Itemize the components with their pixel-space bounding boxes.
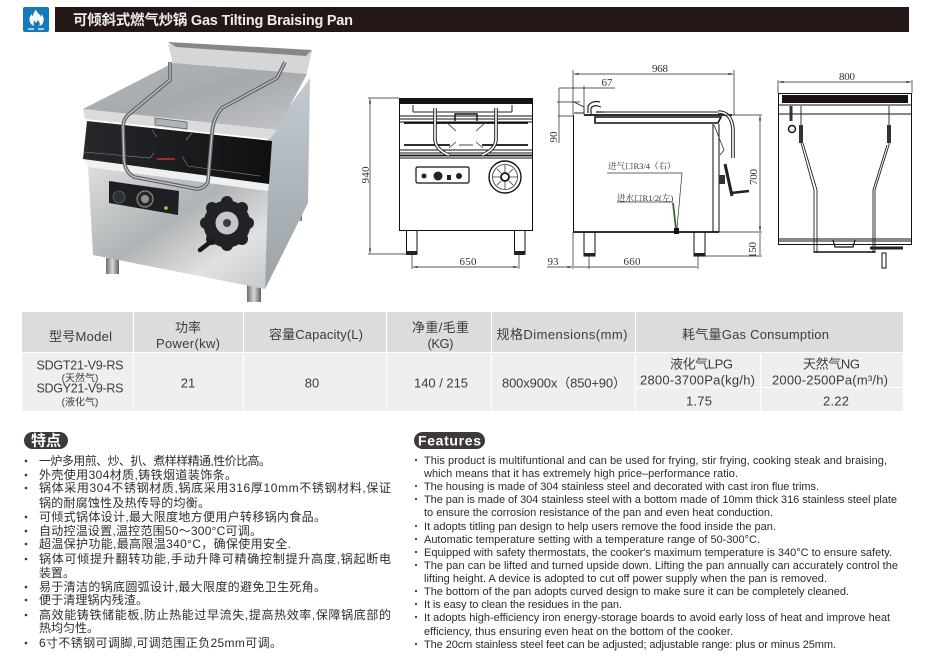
top band [782,95,908,103]
crank handle [731,191,749,193]
handle bar [814,251,875,253]
side panel [265,78,310,289]
weight value: 140 / 215 [414,376,468,390]
hinge tube [588,102,604,114]
left bracket [801,106,817,253]
right clamp [887,125,891,143]
handle tube [123,62,285,189]
Chinese feature list: 锅体采用304不锈钢材质,锅底采用316厚10mm不锈钢材料,保证 [39,480,391,495]
top line [584,114,732,116]
wheel hub [501,173,509,181]
English feature list: The 20cm stainless steel feet can be adjusted; adjustable range: plus or minus 25mm. [424,639,836,651]
English feature list: to ensure the corrosion resistance of the pan and even heat conduction. [424,507,773,519]
dimension 67 [559,77,615,115]
wheel spokes [493,165,517,189]
Chinese feature list: 超温保护功能,最高限温340°C，确保使用安全. [39,536,291,551]
title text: 可倾斜式燃气炒锅 Gas Tilting Braising Pan [73,11,353,29]
front panel [88,166,268,289]
English feature list: Equipped with safety thermostats, the cooker's maximum temperature is 340°C to ensure safety. [424,547,892,559]
header: weight: (KG) [428,336,454,351]
header: power: Power(kw) [156,336,220,351]
Chinese feature list: 装置。 [39,566,75,580]
NG consumption header [772,356,888,388]
foot blocks [406,251,525,255]
Chinese feature list: 锅体可倾提升翻转功能,手动升降可精确控制提升高度,锅起断电 [39,551,391,566]
LPG value: 1.75 [686,394,712,408]
lift strut [714,125,724,155]
Chinese feature list: 便于清理锅内残渣。 [39,592,148,607]
control panel [416,167,469,183]
legs [584,232,705,256]
dimension 93: 93 [548,256,559,268]
header: gas consumption: 耗气量Gas Consumption [682,327,829,342]
top band [400,98,532,104]
specification table [22,312,903,411]
dimension 660: 660 [624,256,641,268]
housing outline [400,98,532,230]
housing outline [778,94,912,244]
English feature list: Automatic temperature setting with a temperature range of 50-300°C. [424,534,760,546]
indicator light [164,206,168,210]
NG consumption header: 2000-2500Pa(m³/h) [772,372,888,388]
water pipe [673,203,676,229]
panel knobs [422,172,462,180]
rear splash [168,44,312,76]
gas inlet label: 进气口R3/4（右） [608,161,676,171]
dimension 93 [547,256,572,268]
Chinese feature list [25,453,391,650]
wheel silver ring [216,212,238,234]
dimension 660 [573,232,698,269]
brand mark [459,144,473,146]
left knob [113,191,125,203]
lid clip [155,118,187,129]
dimension 968: 968 [652,63,668,75]
LPG consumption header: 液化气LPG [670,356,733,372]
legs [406,230,525,254]
heading: Chinese features [24,432,68,450]
heading: Chinese features: 特点 [31,432,61,450]
model values: SDGT21-V9-RS [36,358,124,372]
Chinese feature list: 高效能铸铁储能板,防止热能过早流失,提高热效率,保障锅底部的 [39,607,391,622]
body row background [22,352,903,411]
LPG consumption header [640,356,755,388]
heading: English features: Features [418,432,481,448]
dimension 650: 650 [460,256,477,268]
lid surface [604,111,718,113]
rear vent [168,42,312,56]
header row background [22,312,903,352]
front left foot [106,258,119,274]
lid top [83,63,307,130]
English feature list: It adopts high-efficiency iron energy-storage boards to avoid early loss of heat and improve heat [424,612,890,624]
dimension 700 and 150: 700 [748,168,760,185]
crank wheel [489,161,521,193]
lid clip [455,114,477,121]
lid details [400,116,532,158]
lid dark strips [400,123,532,156]
crank handle [882,253,886,268]
front right foot [247,285,261,302]
upper bracket [413,105,512,112]
band trim lines [84,130,260,176]
header: power [156,320,220,351]
header: weight [412,320,469,351]
foot blocks [584,253,705,256]
drawing: front elevation [360,98,532,269]
control panel [109,181,179,215]
wheel ring [492,164,518,190]
pan handle [718,112,733,158]
Chinese feature list: 热均匀性。 [39,621,99,635]
bottom rail [573,231,719,233]
model values: SDGY21-V9-RS [36,382,124,396]
header: weight: 净重/毛重 [412,320,469,335]
Chinese feature list: 可倾式锅体设计,最大限度地方便用户转移锅内食品。 [39,509,326,524]
housing outline [574,115,719,232]
dimension 940 [360,98,408,254]
crank wheel scallops [200,196,254,251]
pan body [595,117,721,123]
gas leader line [607,173,682,228]
rear foot [296,200,302,221]
gas fitting [790,106,792,121]
gas connector [788,126,796,132]
temperature knob [137,191,153,207]
right bracket [873,106,889,253]
handles [435,108,496,155]
trim lines [446,122,486,148]
dimension 700 and 150 [705,115,762,258]
model values [36,358,124,408]
dimension 90 [548,88,580,143]
English feature list: The housing is made of 304 stainless steel and decorated with cast iron flue trims. [424,481,819,493]
English feature list: lifting height. A device is adopted to cut off power supply when the pan is removed. [424,573,827,585]
English feature list: It adopts titling pan design to help users remove the food inside the pan. [424,521,776,533]
dimension 90: 90 [548,131,560,142]
power value: 21 [181,376,195,390]
crank wheel [870,246,903,250]
title bar [55,7,909,32]
water inlet label: 进水口R1/2(左) [617,193,673,203]
product photo: tilting braising pan [83,42,312,302]
flue wedge [574,102,584,113]
black control band [83,121,272,184]
wheel handle [200,240,213,250]
inlet fitting [674,228,679,234]
crank wheel [204,200,250,248]
water leader line [617,201,673,203]
lid clip [833,240,855,247]
Chinese feature list: 一炉多用煎、炒、扒、煮样样精通,性价比高。 [39,453,271,468]
brand mark [157,158,175,160]
Chinese feature list: 6寸不锈钢可调脚,可调范围正负25mm可调。 [39,635,282,650]
dimension 650 [412,254,519,269]
model values: (液化气) [62,396,98,408]
dimension 968 [573,63,734,115]
dimension 700 and 150: 150 [747,242,759,258]
English feature list: It is easy to clean the residues in the pan. [424,599,622,611]
dimension 800: 800 [839,71,856,83]
left clamp [799,125,803,143]
NG consumption header: 天然气NG [803,356,860,372]
crank hub [719,175,725,184]
wheel hub [223,219,231,227]
drawing: rear elevation [778,71,912,268]
English feature list: The bottom of the pan adopts curved design to make sure it can be completely cleaned. [424,586,849,598]
English feature list [415,455,898,651]
Chinese feature list: 自动控温设置,温控范围50～300°C可调。 [39,524,262,538]
pan handle highlight [718,112,733,158]
Chinese feature list: 外壳使用304材质,铸铁烟道装饰条。 [39,467,237,482]
dimension 800 [778,71,912,93]
Chinese feature list: 锅的耐腐蚀性及热传导的均衡。 [39,495,210,510]
horizontal details [778,105,912,241]
lid front lip [83,109,277,139]
header: capacity: 容量Capacity(L) [269,327,363,342]
English feature list: efficiency, thus ensuring even heat on the bottom of the cooker. [424,626,733,638]
drawing: side elevation [547,63,762,269]
Chinese feature list: 易于清洁的锅底圆弧设计,最大限度的避免卫生死角。 [39,579,326,594]
dimension 940: 940 [360,166,372,184]
header: power: 功率 [175,320,201,335]
dimension 67: 67 [602,77,613,89]
header: model: 型号Model [49,329,112,344]
handle highlights [435,108,496,155]
dimensions value: 800x900x（850+90） [502,376,626,390]
NG value: 2.22 [823,394,849,408]
crank wheel [725,164,732,196]
capacity value: 80 [305,376,319,390]
white ledge [84,159,269,191]
dial centre [141,195,149,203]
English feature list: which means that it has extremely high price–performance ratio. [423,468,738,480]
English feature list: This product is multifuntional and can be used for frying, stir frying, cooking steak and braising, [424,455,887,467]
English feature list: The pan is made of 304 stainless steel with a bottom made of 10mm thick 316 stainless steel plate [424,494,897,506]
table dividers [22,312,903,411]
model values: (天然气) [62,372,98,384]
LPG consumption header: 2800-3700Pa(kg/h) [640,372,755,388]
handle highlight [123,62,285,189]
header: dimensions: 规格Dimensions(mm) [496,327,628,342]
English feature list: The pan can be lifted and turned upside down. Lifting the pan annually can accurately control the [424,560,898,572]
icon: gas flame [23,7,49,32]
